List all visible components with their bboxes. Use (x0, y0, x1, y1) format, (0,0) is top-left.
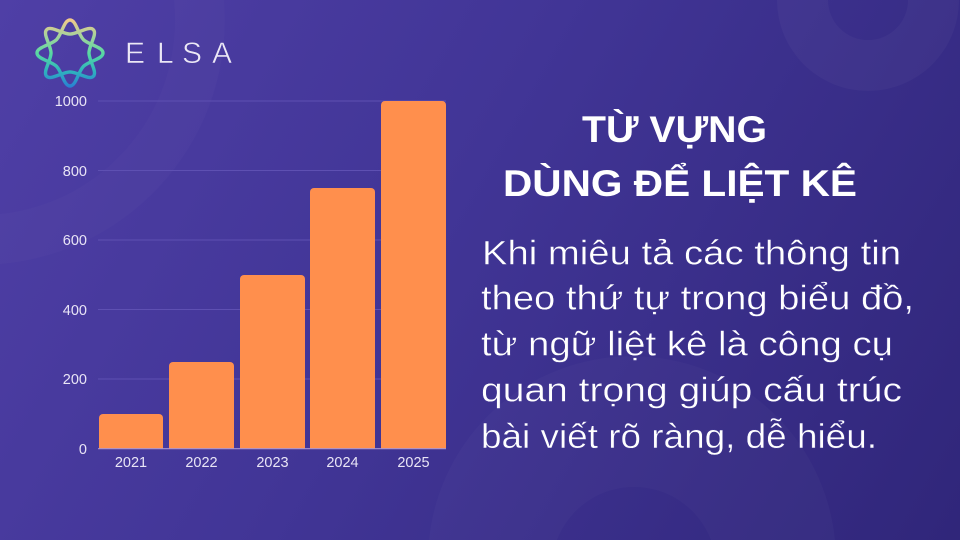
y axis labels: 200 (63, 372, 87, 388)
x axis labels: 2022 (185, 455, 218, 471)
body text (481, 234, 914, 456)
logo: ELSA (35, 18, 232, 88)
x axis labels: 2024 (326, 455, 359, 471)
bar: 2023 (240, 275, 305, 448)
heading: DÙNG ĐỂ LIỆT KÊ (503, 162, 857, 204)
x axis labels: 2025 (397, 455, 430, 471)
y axis labels (55, 94, 87, 458)
y axis labels: 400 (63, 303, 87, 319)
body text: Khi miêu tả các thông tin (482, 234, 901, 272)
logo wordmark: ELSA (125, 37, 232, 70)
y axis labels: 800 (63, 164, 87, 180)
grid lines (98, 101, 446, 379)
heading: TỪ VỰNG (582, 108, 767, 150)
bar: 2021 (99, 414, 163, 448)
x axis labels (115, 455, 430, 471)
body text: bài viết rõ ràng, dễ hiểu. (481, 418, 877, 456)
y axis labels: 1000 (55, 94, 87, 110)
body text: theo thứ tự trong biểu đồ, (481, 280, 914, 318)
body text: quan trọng giúp cấu trúc (481, 372, 902, 410)
heading (503, 108, 857, 204)
bar chart (55, 94, 446, 471)
bars (99, 101, 446, 448)
icon: ELSA rosette (35, 18, 105, 88)
y axis labels: 600 (63, 233, 87, 249)
bar: 2024 (310, 188, 375, 448)
y axis labels: 0 (79, 442, 87, 458)
bar: 2022 (169, 362, 234, 448)
x axis labels: 2021 (115, 455, 147, 471)
bar: 2025 (381, 101, 446, 448)
body text: từ ngữ liệt kê là công cụ (481, 326, 893, 364)
x axis labels: 2023 (256, 455, 289, 471)
x axis line (98, 448, 446, 450)
